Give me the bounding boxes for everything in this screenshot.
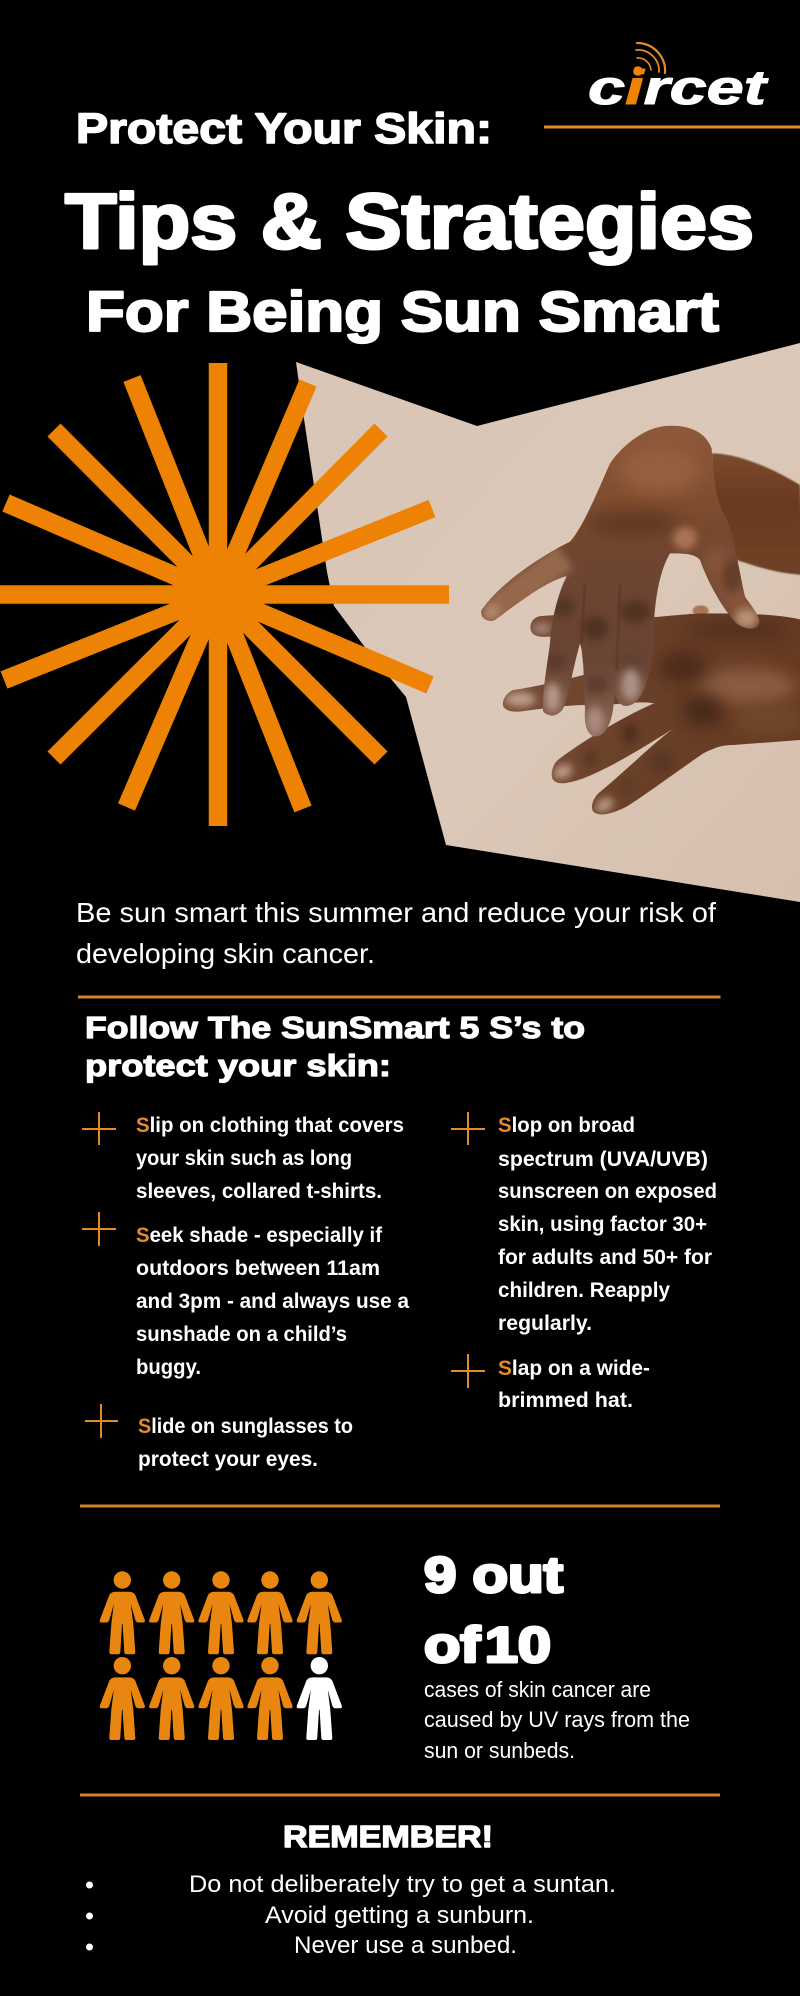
tip: slap: brimmed hat. xyxy=(498,1388,633,1412)
logo signal arcs xyxy=(633,43,665,76)
stat: 9 out of 10: of 10 xyxy=(424,1617,551,1673)
stat description: sun or sunbeds. xyxy=(424,1738,575,1763)
lower hand nails xyxy=(505,692,535,707)
forearm xyxy=(712,453,800,575)
stat: 9 out of 10: 9 out xyxy=(424,1547,563,1603)
tip: slop: skin, using factor 30+ xyxy=(498,1212,707,1236)
icon: plus xyxy=(82,1212,116,1246)
intro text xyxy=(76,897,716,969)
photo: hands on skin-tone background xyxy=(290,340,800,910)
tip: seek xyxy=(82,1212,410,1379)
intro text: Be sun smart this summer and reduce your risk of xyxy=(76,897,716,928)
tip: slop: Slop on broad xyxy=(498,1113,635,1137)
icon: plus xyxy=(85,1404,118,1438)
heading: remember: REMEMBER! xyxy=(283,1819,493,1854)
heading: SunSmart 5 S's: Follow The SunSmart 5 S’s to xyxy=(85,1010,585,1045)
title line 3: For Being Sun Smart xyxy=(86,280,719,344)
upper hand nails xyxy=(545,683,561,712)
lower hand xyxy=(500,607,800,820)
tip: slap xyxy=(451,1354,650,1412)
icon: plus xyxy=(451,1354,485,1388)
tip: slop: for adults and 50+ for xyxy=(498,1245,713,1269)
title line 2: Tips & Strategies xyxy=(65,177,754,265)
sun burst xyxy=(0,363,449,826)
stat description: caused by UV rays from the xyxy=(424,1707,690,1732)
tip: seek: buggy. xyxy=(136,1355,201,1379)
tip: slip: Slip on clothing that covers xyxy=(136,1113,404,1137)
remember list: Never use a sunbed. xyxy=(294,1932,517,1959)
tip: seek: sunshade on a child’s xyxy=(136,1322,347,1346)
tip: slop xyxy=(451,1112,717,1335)
tip: slip: sleeves, collared t-shirts. xyxy=(136,1179,382,1203)
intro text: developing skin cancer. xyxy=(76,938,375,969)
tip: seek: outdoors between 11am xyxy=(136,1256,380,1280)
stat description: cases of skin cancer are xyxy=(424,1677,651,1702)
stat: 9 out of 10 xyxy=(424,1547,563,1673)
tip: slop: children. Reapply xyxy=(498,1278,670,1302)
tip: seek: Seek shade - especially if xyxy=(136,1223,383,1247)
remember list xyxy=(86,1871,616,1959)
tip: slip: your skin such as long xyxy=(136,1146,352,1170)
tip: slide: Slide on sunglasses to xyxy=(138,1414,353,1438)
tip: slop: spectrum (UVA/UVB) xyxy=(498,1147,708,1171)
heading: SunSmart 5 S's xyxy=(85,1010,585,1083)
tip: slip xyxy=(82,1112,404,1203)
stat description xyxy=(424,1677,690,1763)
remember list: Do not deliberately try to get a suntan. xyxy=(189,1871,616,1898)
tip: slide: protect your eyes. xyxy=(138,1447,318,1471)
tip: slop: sunscreen on exposed xyxy=(498,1179,717,1203)
logo: circet xyxy=(588,43,769,115)
tip: slide xyxy=(85,1404,353,1471)
knuckles xyxy=(551,597,574,617)
logo wordmark: circet xyxy=(588,62,769,115)
left finger xyxy=(488,557,565,614)
remember list: Avoid getting a sunburn. xyxy=(265,1902,534,1929)
header rule xyxy=(544,126,800,128)
upper hand xyxy=(477,423,763,740)
finger separation lines xyxy=(582,583,620,670)
tip: slap: Slap on a wide- xyxy=(498,1356,650,1380)
web and thumb xyxy=(673,527,697,550)
title line 1: Protect Your Skin: xyxy=(76,105,492,153)
icon: plus xyxy=(451,1112,485,1145)
icon: plus xyxy=(82,1112,116,1145)
tip: slop: regularly. xyxy=(498,1311,592,1335)
pictogram: 9 of 10 people xyxy=(100,1571,342,1740)
small fingertip behind hand xyxy=(693,605,709,616)
title xyxy=(65,105,754,344)
heading: SunSmart 5 S's: protect your skin: xyxy=(85,1048,391,1083)
tip: seek: and 3pm - and always use a xyxy=(136,1289,410,1313)
